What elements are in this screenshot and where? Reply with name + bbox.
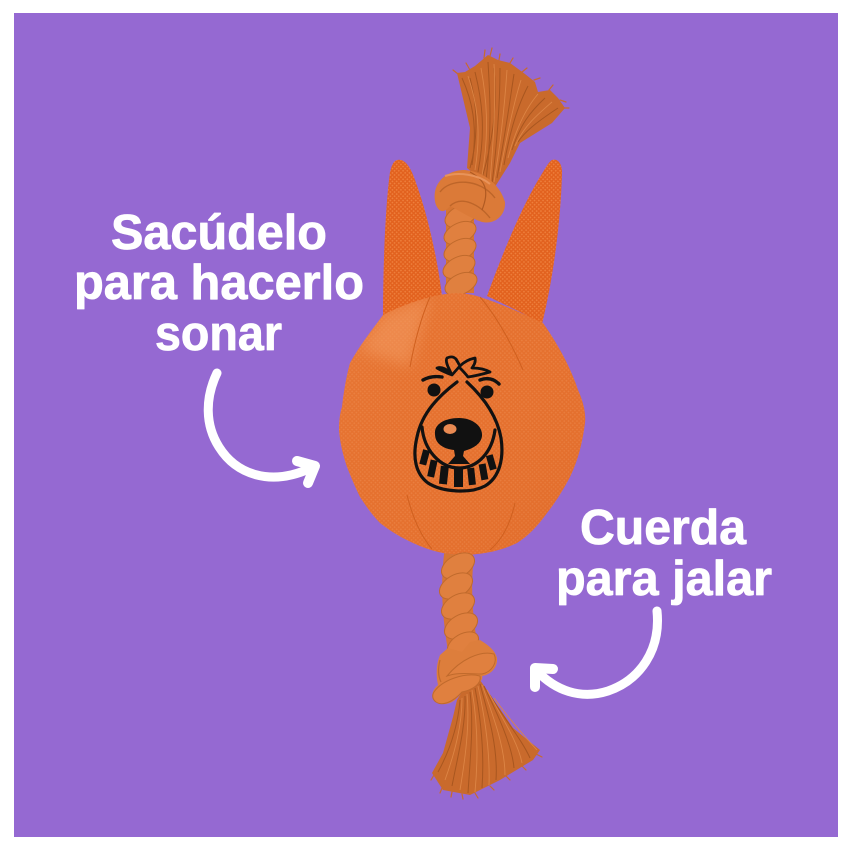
lower knot	[432, 640, 497, 704]
toy	[339, 48, 585, 799]
upper rope	[439, 200, 481, 300]
panel seams	[407, 297, 523, 550]
nose	[435, 418, 482, 464]
left ear	[383, 160, 442, 316]
upper knot	[435, 170, 505, 223]
dog face logo	[415, 357, 502, 491]
right ear	[487, 160, 562, 324]
label: shake it: Sacúdelo	[111, 206, 327, 260]
arrow: to the rope	[535, 611, 657, 694]
label: tug rope: Cuerda	[580, 501, 747, 555]
teeth	[419, 449, 497, 487]
frayed ends	[431, 754, 542, 799]
label: shake it: para hacerlo	[74, 256, 364, 310]
hair	[437, 357, 490, 377]
smile	[422, 427, 495, 468]
top rope tassel	[453, 48, 569, 190]
left upper panel highlight	[362, 300, 428, 366]
label: tug rope	[556, 501, 772, 606]
arrow: to the ball	[208, 373, 315, 483]
lower rope	[435, 547, 483, 661]
ball body	[339, 293, 585, 555]
head outline	[415, 382, 502, 491]
lower tassel	[431, 680, 542, 799]
eyes	[428, 384, 440, 396]
label: tug rope: para jalar	[556, 552, 772, 606]
brows	[423, 376, 442, 380]
frayed ends	[453, 48, 569, 108]
label: shake it: sonar	[155, 307, 282, 361]
label: shake it	[74, 206, 364, 361]
